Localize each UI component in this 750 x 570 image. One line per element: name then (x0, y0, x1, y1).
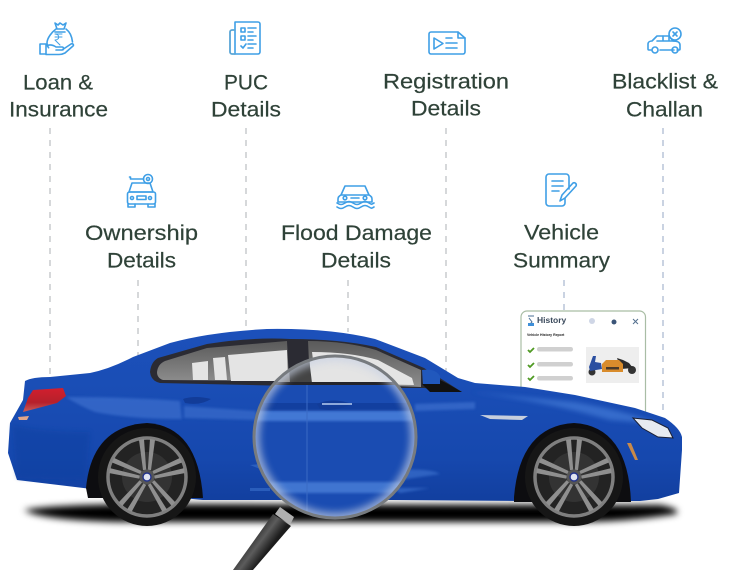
headlight (633, 418, 673, 438)
feature: Ownership Details (85, 174, 198, 273)
window reflections (192, 350, 414, 385)
icon: money bag in hand (40, 23, 73, 54)
side mirror (422, 380, 462, 392)
front wheel (525, 428, 623, 526)
car body (8, 329, 682, 501)
feature: Flood Damage Details (281, 186, 432, 273)
icon: car in flood water (337, 186, 374, 208)
label: Vehicle (524, 222, 599, 245)
feature: Vehicle Summary (513, 174, 611, 273)
handle collar (275, 507, 294, 525)
card logo: History (537, 315, 567, 325)
icon: car with key (128, 174, 156, 207)
side vent (480, 415, 528, 420)
label: Registration (383, 71, 509, 94)
feature: Vehicle Summary: Summary (513, 250, 611, 273)
body highlights (12, 392, 660, 493)
magnifying glass (233, 350, 420, 570)
card checklist (528, 347, 573, 380)
lens contents (256, 358, 414, 516)
front marker (627, 443, 638, 460)
card heading: Vehicle History Report (527, 333, 565, 337)
feature: Blacklist & Challan: Challan (626, 99, 703, 122)
label: Ownership (85, 222, 198, 245)
feature: Registration Details: Details (411, 98, 481, 121)
icon: checklist document (230, 22, 260, 54)
ground shadow (24, 504, 677, 522)
rear wheel (98, 428, 196, 526)
feature: PUC Details (211, 22, 281, 122)
feature: Ownership Details: Details (107, 250, 176, 273)
icon: registration card (429, 32, 465, 54)
feature: Loan & Insurance (9, 23, 108, 122)
report preview card (521, 311, 646, 426)
tail light (23, 388, 66, 412)
rear wheel arch (86, 423, 203, 498)
feature: Blacklist & Challan (612, 28, 718, 122)
icon: document with pen (546, 174, 576, 206)
card vehicle photo (586, 347, 639, 383)
feature: PUC Details: Details (211, 99, 281, 122)
car (8, 329, 682, 526)
window frame and glass (150, 339, 462, 392)
feature: Loan & Insurance: Insurance (9, 99, 108, 122)
feature: Registration Details (383, 32, 509, 121)
rear door handle (183, 397, 211, 404)
feature: Flood Damage Details: Details (321, 250, 391, 273)
dashed connector lines (50, 128, 663, 412)
handle (233, 514, 291, 570)
icon: car with cross badge (648, 28, 681, 53)
label: Flood Damage (281, 222, 432, 245)
rear reflector (18, 416, 29, 420)
label: Blacklist & (612, 71, 718, 94)
label: Loan & (23, 72, 93, 95)
front wheel arch (514, 423, 631, 502)
label: PUC (224, 72, 268, 95)
card header icons (589, 318, 638, 324)
lens rim (254, 356, 416, 518)
